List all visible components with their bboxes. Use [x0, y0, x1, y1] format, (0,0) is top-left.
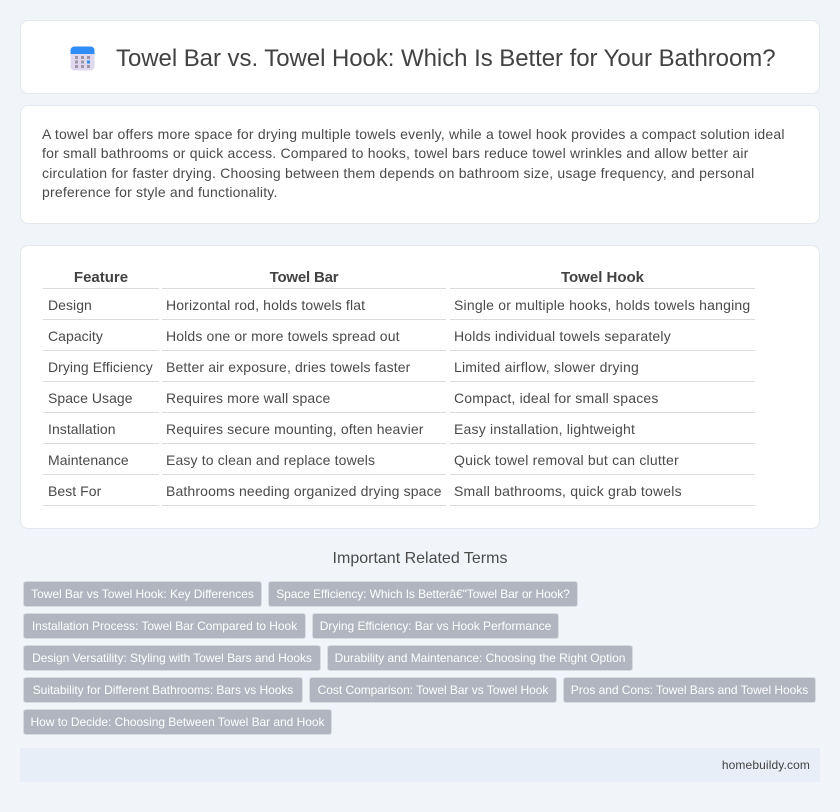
tag — [24, 614, 305, 638]
icon: calendar — [70, 46, 94, 70]
tag: Design Versatility: Styling with Towel Bars and Hooks — [32, 651, 312, 665]
table row: design — [48, 297, 750, 313]
text block: intro paragraph — [42, 126, 785, 200]
tag — [269, 582, 577, 606]
table row: drying efficiency: Drying Efficiency — [48, 359, 153, 375]
table row: maintenance: Easy to clean and replace towels — [166, 452, 375, 468]
tag: Installation Process: Towel Bar Compared to Hook — [32, 619, 297, 633]
table header row: Towel Hook — [561, 269, 644, 286]
tag — [24, 646, 320, 670]
tag — [328, 646, 632, 670]
table row: drying efficiency: Limited airflow, slower drying — [454, 359, 639, 375]
text block: intro paragraph: for small bathrooms or quick access. Compared to hooks, towel bars reduce towel wrinkles and allow better air — [42, 145, 749, 161]
table row: installation — [48, 421, 635, 437]
table header row — [74, 269, 644, 286]
heading: related terms: Important Related Terms — [333, 550, 507, 567]
table row: best for — [48, 483, 682, 499]
title: Towel Bar vs. Towel Hook: Which Is Better for Your Bathroom? — [116, 45, 776, 72]
tag — [310, 678, 556, 702]
text block: intro paragraph: A towel bar offers more space for drying multiple towels evenly, while a towel hook provides a compact solution ideal — [42, 126, 785, 142]
panel: title header — [20, 20, 820, 94]
table header row: Feature — [74, 269, 128, 286]
tag: Towel Bar vs Towel Hook: Key Differences — [31, 587, 254, 601]
tag: Drying Efficiency: Bar vs Hook Performance — [320, 619, 551, 633]
text block: intro paragraph: circulation for faster drying. Choosing between them depends on bathroom size, usage frequency, and personal — [42, 165, 754, 181]
table row: drying efficiency: Better air exposure, dries towels faster — [166, 359, 410, 375]
tag — [24, 582, 261, 606]
table row: installation: Requires secure mounting, often heavier — [166, 421, 424, 437]
tag — [564, 678, 815, 702]
panel: comparison table — [20, 245, 820, 529]
table row: maintenance: Quick towel removal but can clutter — [454, 452, 679, 468]
table row: space usage — [48, 390, 659, 406]
table row: maintenance — [48, 452, 679, 468]
table row: best for: Bathrooms needing organized drying space — [166, 483, 442, 499]
table row: best for: Best For — [48, 483, 101, 499]
tag: Pros and Cons: Towel Bars and Towel Hooks — [571, 683, 808, 697]
text block: intro paragraph: preference for style and functionality. — [42, 184, 278, 200]
tag: Suitability for Different Bathrooms: Bars vs Hooks — [33, 683, 293, 697]
table row: design: Horizontal rod, holds towels flat — [166, 297, 365, 313]
table row: drying efficiency — [48, 359, 639, 375]
table row: installation: Installation — [48, 421, 116, 437]
table row: space usage: Compact, ideal for small spaces — [454, 390, 659, 406]
table row: capacity: Holds individual towels separately — [454, 328, 671, 344]
table row: capacity — [48, 328, 671, 344]
table row: maintenance: Maintenance — [48, 452, 129, 468]
tag — [24, 678, 302, 702]
table row: best for: Small bathrooms, quick grab towels — [454, 483, 682, 499]
tag: How to Decide: Choosing Between Towel Bar and Hook — [31, 715, 324, 729]
tag: Space Efficiency: Which Is Betterâ€"Towel Bar or Hook? — [276, 587, 570, 601]
tag: Cost Comparison: Towel Bar vs Towel Hook — [318, 683, 548, 697]
table row: capacity: Holds one or more towels spread out — [166, 328, 400, 344]
tag — [313, 614, 558, 638]
tag — [24, 710, 331, 734]
table row: design: Single or multiple hooks, holds towels hanging — [454, 297, 750, 313]
footer bar — [20, 748, 820, 782]
table row: capacity: Capacity — [48, 328, 103, 344]
tag list: related terms — [23, 581, 816, 735]
table row: space usage: Space Usage — [48, 390, 133, 406]
panel: introduction — [20, 105, 820, 224]
tag: Durability and Maintenance: Choosing the Right Option — [335, 651, 625, 665]
table row: installation: Easy installation, lightweight — [454, 421, 635, 437]
table row: space usage: Requires more wall space — [166, 390, 330, 406]
footer text: site name: homebuildy.com — [722, 758, 810, 772]
table header row: Towel Bar — [270, 269, 338, 286]
table row: design: Design — [48, 297, 92, 313]
